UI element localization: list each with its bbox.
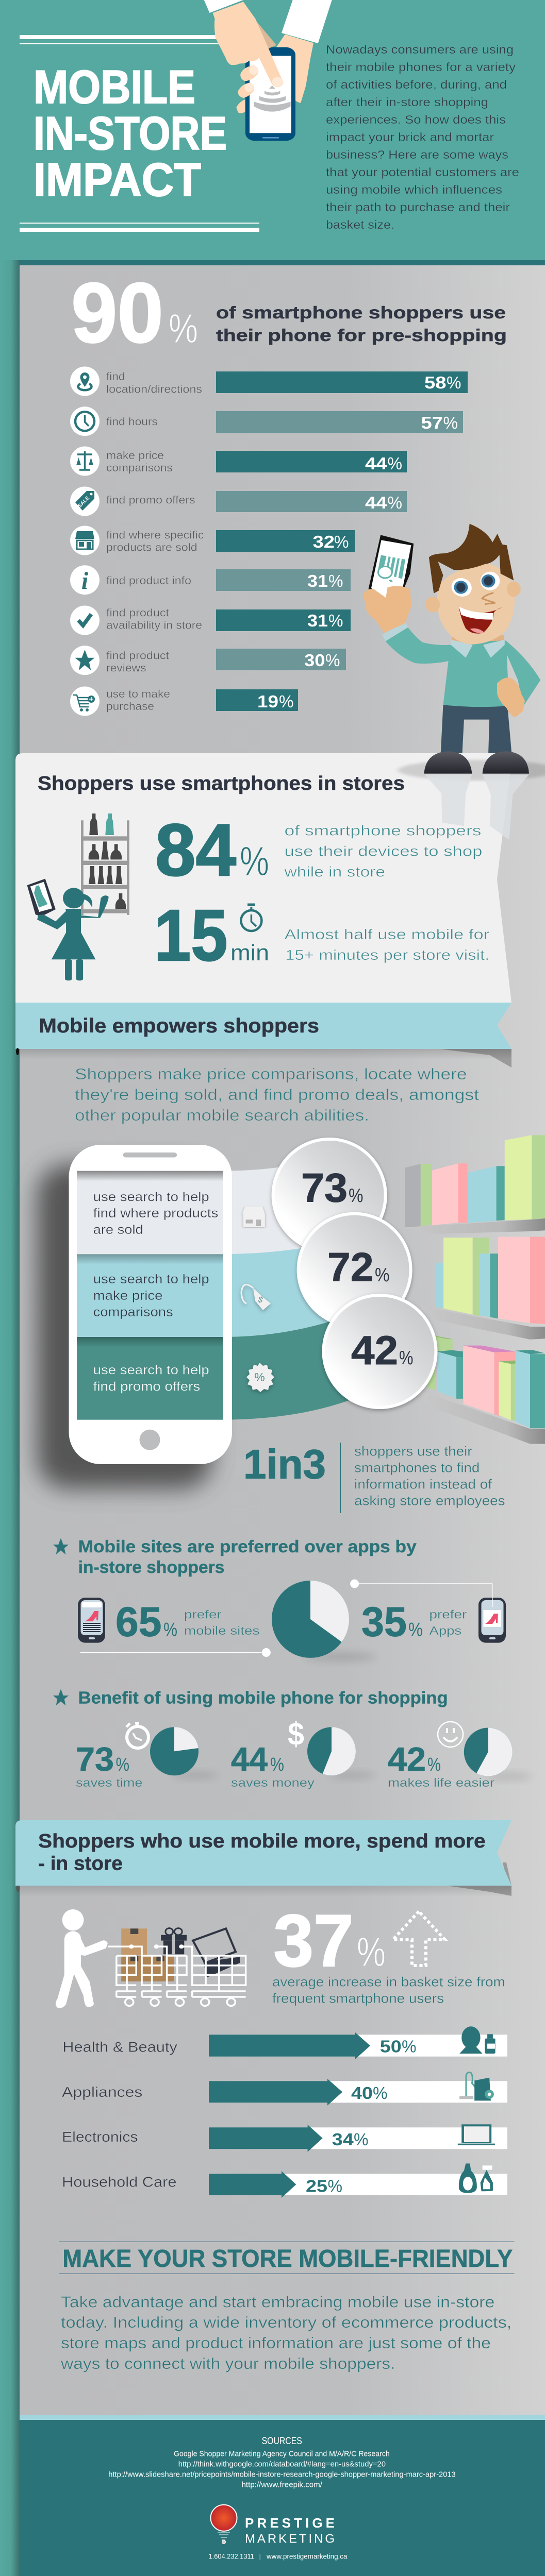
nose	[482, 593, 496, 604]
icon: price tag small	[241, 1284, 271, 1310]
row: health and beauty: Health & Beauty	[62, 2039, 177, 2055]
benefit: saves time: saves time	[76, 1776, 142, 1789]
bar: 44% price: %	[388, 454, 402, 473]
bar: 58%	[216, 371, 468, 393]
search row 1: find where products	[93, 1206, 218, 1221]
search row 2: comparisons	[93, 1305, 173, 1319]
bar: 32%: 32	[312, 533, 335, 552]
icon: laptop	[458, 2124, 495, 2145]
bubble: 73%	[273, 1139, 386, 1251]
search row 2: use search to help	[93, 1272, 209, 1286]
text: 15 min description: Almost half use mobile for	[285, 926, 489, 942]
row: household care: 25	[306, 2177, 327, 2196]
text: mobile empowers intro: Shoppers make price comparisons, locate where	[75, 1065, 467, 1083]
icon: cleaning bottles	[459, 2163, 493, 2193]
row: appliances: 40	[351, 2084, 373, 2103]
section: benefit of using mobile	[53, 1688, 532, 1789]
bar: 30%: 30	[304, 651, 325, 670]
benefit: saves money	[231, 1717, 375, 1789]
stat: 1 in 3: shoppers use their	[354, 1444, 472, 1459]
sources: Google Shopper Marketing Agency Council and M/A/R/C Research	[174, 2450, 390, 2459]
title: IN-STORE	[34, 108, 227, 160]
body text: ways to connect with your mobile shoppers.	[60, 2354, 395, 2372]
benefit: makes life easier: makes life easier	[388, 1776, 494, 1789]
activity labels: find hours	[106, 416, 158, 428]
row: appliances: %	[373, 2084, 388, 2103]
bubble: 42%: %	[399, 1347, 414, 1369]
intro text: impact your brick and mortar	[326, 130, 494, 144]
intro text: that your potential customers are	[326, 165, 519, 179]
shelf row 2	[436, 1263, 444, 1309]
icon: info: i	[81, 567, 89, 595]
icon: scales	[70, 446, 100, 476]
contact: 1.604.232.1311	[208, 2552, 254, 2561]
bar: 30%	[216, 649, 346, 670]
body text: Take advantage and start embracing mobile use in-store	[61, 2293, 494, 2311]
section: pre-shopping headline: %	[169, 306, 198, 351]
shoes	[424, 751, 472, 774]
bar: 31% availability: %	[328, 612, 343, 631]
bar: 31% info	[216, 569, 351, 591]
search row 1: use search to help	[93, 1190, 209, 1205]
activity labels	[106, 371, 204, 713]
intro text: business? Here are some ways	[326, 148, 508, 161]
mouth	[459, 606, 502, 634]
search row 2	[77, 1254, 223, 1337]
footer	[20, 2415, 545, 2576]
text: basket size description: frequent smartphone users	[272, 1991, 444, 2006]
heading: Shoppers who use mobile more, spend more	[38, 1831, 486, 1852]
bubble: 73%: 73	[301, 1165, 348, 1211]
shoe shadow and reflections	[398, 760, 545, 840]
stat: 84%: %	[240, 838, 269, 884]
row: household care	[62, 2163, 507, 2198]
shelf row 3	[436, 1336, 453, 1351]
bar: 57%: 57	[421, 414, 443, 433]
activity labels: reviews	[106, 663, 146, 674]
activity labels: find where specific	[106, 530, 204, 541]
logo: PRESTIGE	[245, 2515, 335, 2531]
text: 84% description: while in store	[284, 864, 385, 880]
bubble: 72%: %	[375, 1264, 390, 1286]
text: basket size description: average increase in basket size from	[272, 1974, 505, 1990]
icon: vacuum	[459, 2072, 494, 2100]
heading with star: Benefit of using mobile phone for shopping	[78, 1688, 448, 1707]
bubble: 42%	[324, 1295, 436, 1408]
activity labels: find product info	[106, 575, 191, 587]
benefit: saves money: saves money	[231, 1776, 315, 1789]
heading with star: Mobile sites are preferred over apps by	[78, 1537, 417, 1556]
icon: stopwatch	[241, 905, 261, 931]
bar: 57%: %	[443, 414, 458, 433]
row: health and beauty	[62, 2026, 507, 2059]
intro text: their mobile phones for a variety	[326, 60, 516, 74]
title: IMPACT	[34, 154, 201, 206]
icon: bust and bottle	[459, 2026, 496, 2054]
icon: promo badge small	[246, 1363, 274, 1392]
bar: 31% availability	[216, 609, 351, 631]
heading: Shoppers use smartphones in stores	[38, 773, 405, 794]
stat: 15 min: 15	[154, 894, 228, 976]
text: 15 min description	[285, 926, 489, 963]
heading with star	[53, 1537, 417, 1577]
intro text: their path to purchase and their	[326, 200, 510, 214]
activity icons	[70, 367, 100, 716]
illustration: man holding phone	[363, 524, 545, 840]
sources	[108, 2436, 456, 2489]
chart: basket size increase by category	[62, 2026, 507, 2198]
bubble: 72%: 72	[327, 1244, 374, 1290]
illustration: store shelves	[403, 1135, 545, 1444]
bar: 44% promo: %	[388, 494, 402, 513]
left hand on hip	[497, 677, 525, 718]
row: electronics	[62, 2124, 507, 2152]
intro text: using mobile which influences	[326, 183, 502, 196]
cuff	[383, 622, 408, 641]
text: mobile empowers intro	[75, 1065, 479, 1124]
body text: today. Including a wide inventory of ecommerce products,	[61, 2313, 511, 2331]
label: prefer mobile sites	[184, 1607, 259, 1637]
bar chart: pre-shopping activities	[216, 371, 468, 711]
title	[34, 61, 227, 206]
text: 84% description: of smartphone shoppers	[285, 823, 482, 839]
phone	[369, 535, 414, 607]
activity labels: availability in store	[106, 620, 202, 632]
text: 84% description: use their devices to shop	[285, 843, 483, 859]
shelf row 1	[403, 1135, 545, 1444]
band: shoppers who use mobile more	[15, 1820, 511, 1897]
icon: clock	[70, 406, 100, 436]
section: mobile sites vs apps	[53, 1537, 506, 1661]
stat: 37%: 37	[273, 1900, 354, 1982]
activity labels: comparisons	[106, 462, 173, 474]
search row 3: use search to help	[93, 1363, 209, 1377]
icon: phone with app	[478, 1598, 506, 1643]
icon: location pin	[70, 367, 100, 396]
heading: Mobile empowers shoppers	[39, 1015, 319, 1037]
bands behind bubbles	[229, 1167, 351, 1420]
bar: 44% price: 44	[365, 454, 387, 473]
pie chart: 65 / 35	[272, 1581, 376, 1661]
heading: - in store	[38, 1853, 123, 1874]
icon: smiley	[438, 1722, 463, 1747]
label: prefer apps	[429, 1607, 467, 1637]
search row 3	[77, 1337, 223, 1420]
text: basket size description	[272, 1974, 505, 2006]
illustration: phone with search stats	[69, 1139, 436, 1464]
benefit: makes life easier: 42	[388, 1740, 426, 1778]
bar: 32%: %	[334, 533, 349, 552]
icon: dotted up arrow	[393, 1911, 445, 1965]
benefit: makes life easier	[388, 1722, 532, 1789]
panel: shoppers use smartphones in stores	[15, 753, 513, 1003]
goods	[121, 1928, 147, 1955]
logo	[210, 2505, 335, 2546]
bubble: 72%	[299, 1214, 411, 1326]
carts	[108, 1946, 246, 2006]
bar: 44% promo: 44	[365, 494, 387, 513]
bar: 44% promo	[216, 491, 407, 513]
icon: store small	[242, 1207, 265, 1227]
stat: 35%: 35	[361, 1599, 407, 1645]
stat: 1 in 3: 1in3	[243, 1441, 326, 1487]
benefit: saves time: 73	[76, 1740, 114, 1778]
intro text	[326, 43, 519, 231]
section: pre-shopping headline: of smartphone shoppers use	[216, 303, 506, 322]
bar: 19%: %	[279, 692, 294, 711]
intro text: of activities before, during, and	[326, 78, 507, 91]
intro text: basket size.	[326, 218, 394, 231]
activity labels: find product	[106, 650, 169, 662]
right hand holding phone	[363, 586, 411, 633]
activity labels: make price	[106, 450, 164, 462]
text: 15 min description: 15+ minutes per store visit.	[285, 947, 489, 963]
hair	[429, 524, 514, 594]
activity labels: find	[106, 371, 125, 383]
icon: price tag small: $	[257, 1295, 264, 1305]
bar: 31% availability: 31	[307, 612, 328, 631]
stat: 65%: %	[163, 1619, 177, 1640]
figure	[62, 1909, 84, 1930]
stat: 37%: %	[357, 1929, 386, 1975]
bubble: 73%: %	[349, 1185, 363, 1207]
bar: 58%: 58	[424, 374, 447, 393]
section: pre-shopping headline	[71, 265, 507, 360]
icon: hands holding a phone	[204, 0, 332, 141]
benefit: saves money: 44	[231, 1740, 268, 1778]
logo: MARKETING	[245, 2532, 335, 2546]
neck	[452, 635, 504, 648]
label: prefer apps: Apps	[429, 1624, 461, 1637]
connector: apps	[350, 1580, 492, 1607]
activity labels: purchase	[106, 701, 154, 713]
bar: 44% price	[216, 451, 407, 473]
activity labels: location/directions	[106, 384, 202, 396]
activity labels: products are sold	[106, 542, 197, 554]
activity labels: find product	[106, 607, 169, 619]
row: health and beauty: %	[402, 2037, 417, 2056]
icon: store	[70, 526, 100, 555]
activity labels: find promo offers	[106, 495, 195, 506]
head	[437, 563, 515, 645]
bar: 31% info: 31	[307, 572, 328, 591]
search row 1	[77, 1171, 223, 1254]
benefit: saves time	[76, 1723, 218, 1789]
intro text: after their in-store shopping	[326, 95, 488, 109]
stat: 37%	[272, 1900, 505, 2006]
icon: cart	[70, 686, 100, 716]
body text	[60, 2293, 511, 2372]
phone body	[69, 1145, 232, 1464]
icon: sale tag	[70, 486, 100, 516]
sources: http://www.freepik.com/	[241, 2481, 323, 2489]
eyes	[451, 578, 473, 597]
benefit: saves time: %	[115, 1754, 129, 1775]
shadow of phone	[37, 1164, 212, 1489]
label: prefer mobile sites: mobile sites	[184, 1624, 259, 1637]
left teal strip	[0, 260, 20, 2576]
header panel	[0, 0, 545, 265]
icon: phone with mobile site	[78, 1598, 105, 1643]
bar: 19%	[216, 689, 298, 711]
search row 1: are sold	[93, 1223, 143, 1237]
intro text: Nowadays consumers are using	[326, 43, 514, 56]
section: pre-shopping headline: 90	[71, 265, 163, 360]
stat: 35%: %	[408, 1619, 423, 1640]
bar: 32%	[216, 530, 355, 552]
row: household care: Household Care	[62, 2174, 176, 2190]
stat: 1 in 3: smartphones to find	[354, 1460, 480, 1476]
heading with star: in-store shoppers	[78, 1557, 224, 1577]
stat: 1 in 3: asking store employees	[354, 1493, 505, 1509]
heading: MAKE YOUR STORE MOBILE-FRIENDLY	[62, 2245, 513, 2273]
stat: 65%: 65	[115, 1599, 162, 1645]
icon: star	[70, 646, 100, 675]
bar: 58%: %	[447, 374, 461, 393]
search row 3: find promo offers	[93, 1379, 200, 1394]
icon: dollar: $	[288, 1717, 304, 1752]
text: mobile empowers intro: they're being sold, and find promo deals, amongst	[75, 1086, 479, 1104]
text: 84% description	[284, 823, 483, 880]
row: appliances: Appliances	[62, 2084, 142, 2100]
sources: http://think.withgoogle.com/databoard/#lang=en-us&study=20	[178, 2461, 386, 2469]
row: electronics: 34	[332, 2130, 354, 2149]
icon: shelf and shopper with phone	[27, 814, 129, 980]
row: electronics: Electronics	[62, 2129, 138, 2145]
icon: info	[70, 565, 100, 595]
bubble: 42%: 42	[351, 1327, 398, 1373]
collar	[451, 640, 473, 658]
heading	[38, 1831, 486, 1874]
row: electronics: %	[354, 2130, 368, 2149]
text: mobile empowers intro: other popular mobile search abilities.	[75, 1106, 369, 1124]
title: MOBILE	[34, 61, 195, 113]
stat: 84%: 84	[155, 809, 236, 891]
trousers	[441, 705, 511, 753]
sweater	[384, 623, 540, 707]
row: household care: %	[328, 2177, 342, 2196]
icon: promo badge small: %	[254, 1370, 265, 1384]
bar: 57%	[216, 411, 463, 433]
stat: 1 in 3	[243, 1441, 505, 1513]
stat: 1 in 3: information instead of	[354, 1477, 492, 1492]
icon: check	[70, 606, 100, 635]
sources: SOURCES	[262, 2436, 302, 2447]
connector: mobile sites	[80, 1648, 271, 1657]
label: prefer apps: prefer	[429, 1607, 467, 1621]
section: pre-shopping headline: their phone for pre-shopping	[216, 326, 507, 345]
contact: www.prestigemarketing.ca	[266, 2552, 348, 2561]
band: mobile empowers shoppers	[15, 1003, 511, 1067]
body text: store maps and product information are just some of the	[61, 2334, 491, 2352]
benefit: makes life easier: %	[427, 1754, 441, 1775]
label: prefer mobile sites: prefer	[184, 1607, 222, 1621]
bar: 31% info: %	[328, 572, 343, 591]
bar: 19%: 19	[257, 692, 278, 711]
row: health and beauty: 50	[380, 2037, 402, 2056]
benefit: saves money: %	[270, 1754, 284, 1775]
search row 2: make price	[93, 1289, 163, 1303]
intro text: experiences. So how does this	[326, 113, 506, 126]
contact	[208, 2552, 348, 2561]
call to action	[59, 2242, 515, 2372]
icon: stopwatch	[126, 1723, 148, 1748]
illustration: shopper pushing carts	[56, 1909, 246, 2008]
stat: 15 min: min	[230, 940, 269, 965]
icon: sale tag: SALE	[77, 495, 91, 509]
bar: 30%: %	[325, 651, 340, 670]
sources: http://www.slideshare.net/pricepoints/mobile-instore-research-google-shopper-marketing-marc-apr-2013	[108, 2471, 456, 2479]
activity labels: use to make	[106, 688, 170, 700]
row: appliances	[62, 2072, 507, 2106]
